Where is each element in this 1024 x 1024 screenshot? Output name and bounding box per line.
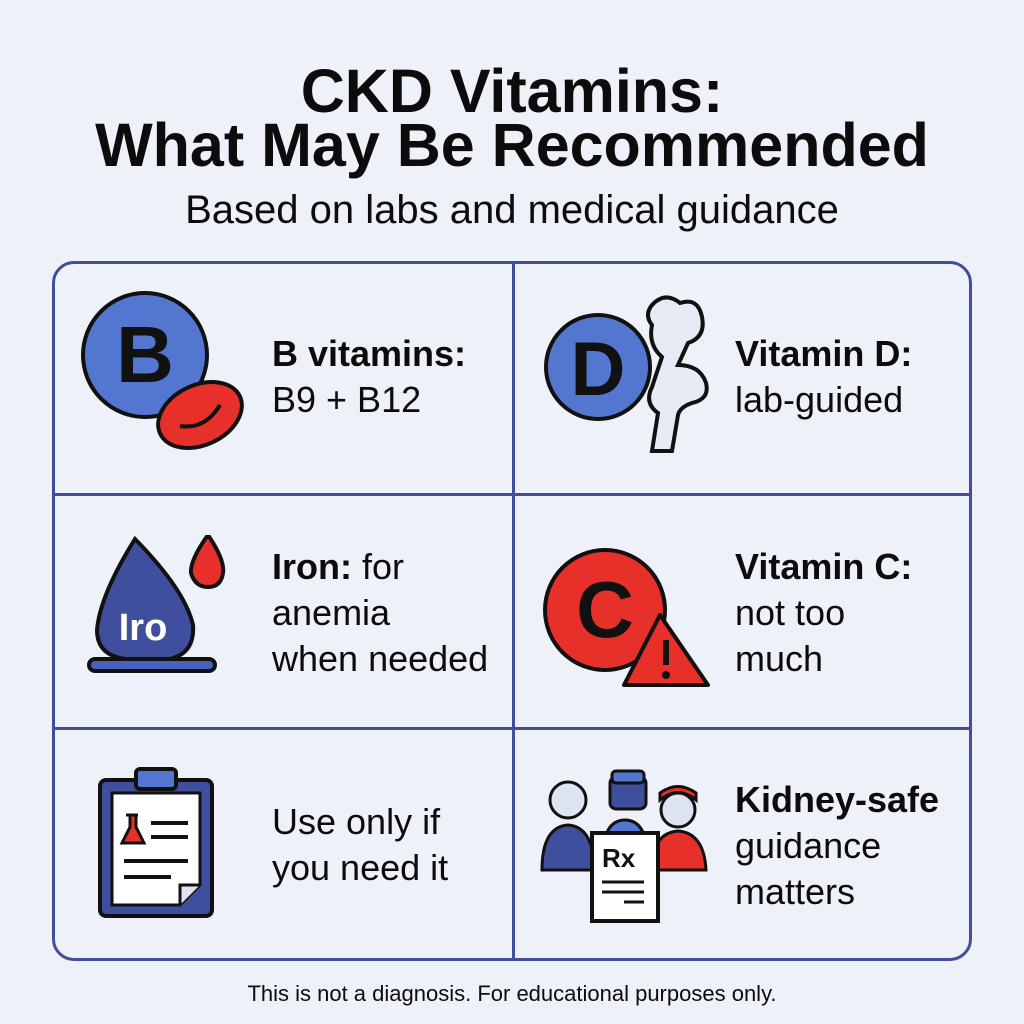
footer disclaimer: This is not a diagnosis. For educational purposes only. — [247, 981, 777, 1006]
text: vitamin C: not too — [735, 592, 845, 633]
grid panel — [52, 261, 972, 961]
text: vitamin D: lab-guided — [735, 379, 903, 420]
text: vitamin D — [735, 333, 912, 420]
text: use only if needed: Use only if — [272, 801, 440, 842]
text: kidney-safe guidance — [735, 779, 939, 912]
text: iron: anemia — [272, 592, 390, 633]
icon: vitamin D with bone: D — [571, 327, 625, 412]
text: vitamin C — [735, 546, 912, 679]
title — [95, 57, 929, 179]
icon: clipboard — [98, 767, 214, 918]
icon: medical team with prescription — [540, 770, 708, 923]
text: kidney-safe guidance: matters — [735, 871, 855, 912]
text: kidney-safe guidance: Kidney-safe — [735, 779, 939, 820]
text: vitamin C: much — [735, 638, 823, 679]
title: CKD Vitamins: — [301, 57, 723, 125]
text: B vitamins: B vitamins: — [272, 333, 466, 374]
title: What May Be Recommended — [95, 111, 929, 179]
icon: iron drop: Iro — [119, 607, 167, 649]
subtitle: Based on labs and medical guidance — [185, 188, 839, 232]
text: iron: when needed — [272, 638, 488, 679]
text: B vitamins — [272, 333, 466, 420]
text: vitamin C: Vitamin C: — [735, 546, 912, 587]
icon: B vitamin with red blood cell — [81, 291, 244, 450]
icon: medical team with prescription: Rx — [602, 843, 636, 873]
text: use only if needed: you need it — [272, 847, 448, 888]
text: iron: Iron: for — [272, 546, 404, 587]
text: use only if needed — [272, 801, 448, 888]
icon: B vitamin with red blood cell: B — [116, 310, 174, 399]
icon: iron drop — [87, 535, 226, 673]
text: vitamin D: Vitamin D: — [735, 333, 912, 374]
text: B vitamins: B9 + B12 — [272, 379, 421, 420]
icon: vitamin C with warning: C — [576, 565, 634, 654]
text: kidney-safe guidance: guidance — [735, 825, 881, 866]
icon: vitamin D with bone — [544, 295, 709, 453]
icon: vitamin C with warning — [543, 548, 710, 687]
text: iron — [272, 546, 488, 679]
